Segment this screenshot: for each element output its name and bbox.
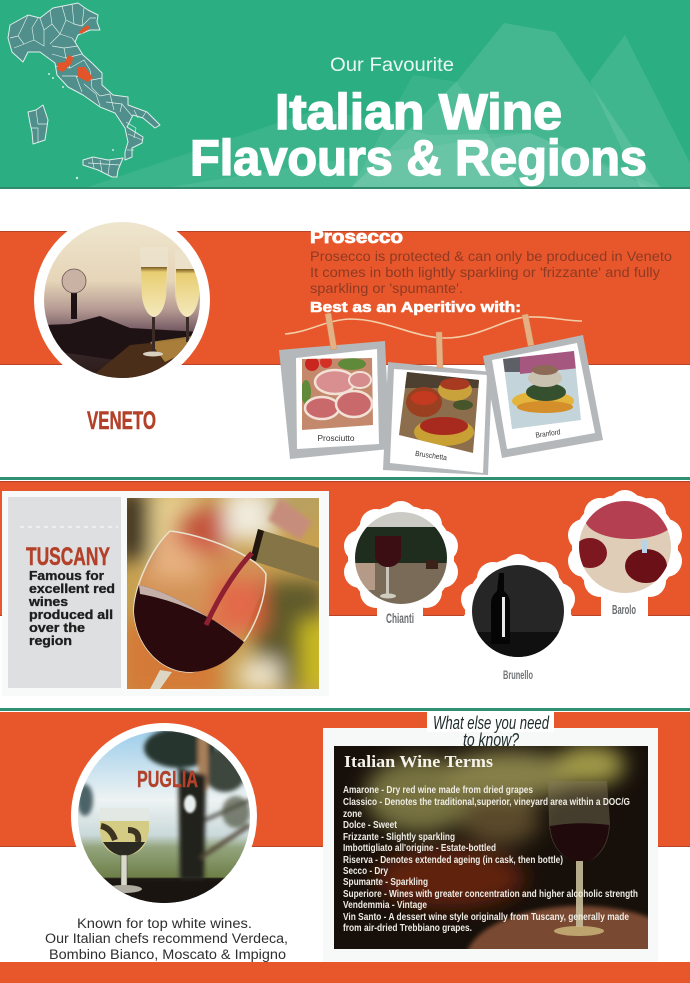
subtitle: Our Favourite	[330, 55, 454, 76]
terms list: Classico - Denotes the traditional,superior, vineyard area within a DOC/G	[343, 797, 630, 808]
terms list: Dolce - Sweet	[343, 820, 398, 831]
Puglia description: Known for top white wines.	[77, 916, 252, 931]
terms list: Superiore - Wines with greater concentration and higher alcoholic strength	[343, 889, 638, 900]
flower badge: Barolo	[568, 490, 682, 617]
Tuscany description: region	[29, 633, 72, 648]
white card	[2, 490, 330, 700]
glass	[548, 781, 610, 861]
terms title: Italian Wine Terms	[344, 752, 493, 771]
caption: Chianti	[386, 610, 414, 626]
map of Italy	[8, 3, 160, 179]
flower badge: Chianti	[344, 501, 458, 627]
caption: Barolo	[612, 602, 636, 617]
Tuscany description: produced all	[29, 607, 113, 622]
terms list	[343, 785, 638, 934]
section: Puglia	[0, 712, 690, 983]
main title: Italian Wine	[275, 84, 562, 140]
glass	[100, 808, 149, 856]
photo: wine pouring into glass	[127, 498, 319, 689]
handwritten heading	[433, 713, 550, 750]
Prosecco description: sparkling or 'spumante'.	[310, 281, 463, 296]
Prosecco heading: Prosecco	[310, 227, 403, 247]
region name: Puglia: PUGLIA	[137, 766, 198, 792]
terms list: Secco - Dry	[343, 866, 388, 877]
handwritten heading: What else you need	[433, 713, 550, 733]
photo circle: Puglia white wine	[71, 723, 257, 909]
panel: wine terms	[323, 712, 658, 949]
grey text panel	[8, 497, 121, 688]
section: Tuscany	[0, 481, 690, 700]
small islands	[48, 73, 114, 179]
main title: Flavours & Regions	[190, 130, 647, 186]
terms list: Vin Santo - A dessert wine style originally from Tuscany, generally made	[343, 912, 629, 923]
terms list: Vendemmia - Vintage	[343, 900, 427, 911]
main title	[190, 84, 647, 186]
Puglia description	[45, 916, 288, 962]
photo circle: Veneto sunset with champagne	[34, 222, 210, 378]
aperitivo heading: Best as an Aperitivo with:	[310, 299, 521, 316]
highlighted regions	[57, 25, 93, 82]
footer band	[0, 962, 690, 983]
bottle neck	[250, 529, 319, 582]
handwritten heading: to know?	[463, 730, 519, 750]
wine stream	[206, 553, 252, 625]
region name: Veneto: VENETO	[87, 407, 156, 435]
stem	[150, 670, 172, 689]
divider: Tuscany to Puglia	[0, 708, 690, 711]
Puglia description: Our Italian chefs recommend Verdeca,	[45, 931, 288, 946]
terms list: Frizzante - Slightly sparkling	[343, 832, 455, 843]
terms list: Riserva - Denotes extended ageing (in cask, then bottle)	[343, 855, 563, 866]
terms list: from air-dried Trebbiano grapes.	[343, 923, 472, 934]
wine glass	[140, 532, 265, 638]
Tuscany description	[28, 568, 115, 648]
clothes pins	[325, 313, 534, 368]
Sardinia	[28, 105, 48, 144]
mountains backdrop	[88, 23, 690, 187]
Prosecco description	[310, 249, 672, 296]
Prosecco description: Prosecco is protected & can only be produced in Veneto	[310, 249, 672, 264]
polaroid: Bruschetta	[383, 362, 492, 475]
polaroid: Branford	[483, 335, 603, 458]
terms list: Imbottigliato all'origine - Estate-bottled	[343, 843, 496, 854]
terms list: Amarone - Dry red wine made from dried grapes	[343, 785, 533, 796]
section: Veneto	[0, 212, 690, 475]
caption: Branford	[535, 427, 561, 440]
terms list: Spumante - Sparkling	[343, 877, 428, 888]
photo: wine glass background	[334, 746, 648, 949]
Tuscany description: Famous for	[29, 568, 104, 583]
header banner	[0, 0, 690, 189]
hanging string	[285, 317, 582, 338]
divider: Veneto to Tuscany	[0, 477, 690, 480]
region name: Tuscany: TUSCANY	[26, 543, 110, 571]
mainland	[8, 3, 160, 160]
Tuscany description: over the	[29, 620, 85, 635]
caption: Brunello	[503, 668, 533, 682]
caption: Bruschetta	[415, 449, 448, 462]
terms list: zone	[343, 809, 362, 820]
caption: Prosciutto	[318, 433, 355, 443]
flower badge: Brunello	[461, 554, 575, 682]
Tuscany description: excellent red	[29, 581, 115, 596]
Tuscany description: wines	[28, 594, 68, 609]
province boundaries	[10, 4, 146, 175]
Prosecco description: It comes in both lightly sparkling or 'frizzante' and fully	[310, 265, 660, 280]
polaroid: Prosciutto	[279, 341, 390, 459]
Puglia description: Bombino Bianco, Moscato & Impigno	[49, 947, 286, 962]
Sicily	[83, 157, 123, 177]
